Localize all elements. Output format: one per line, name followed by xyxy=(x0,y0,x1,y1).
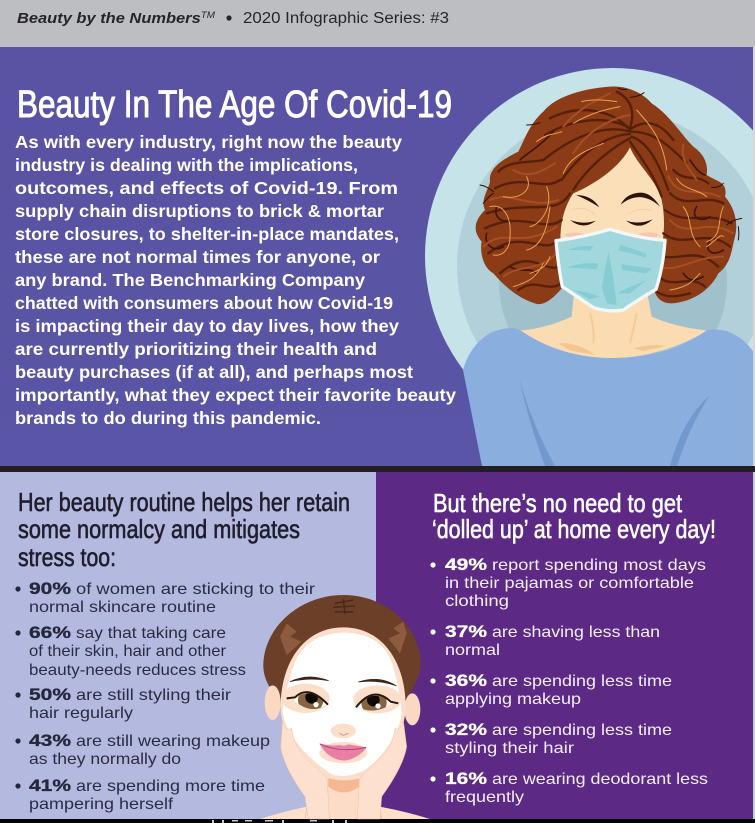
stat 32%: styling their hair xyxy=(445,740,575,757)
stat 43%: as they normally do xyxy=(29,751,181,768)
header bar: 2020 Infographic Series: #3 xyxy=(243,10,449,27)
stat 41%: pampering herself xyxy=(29,796,174,813)
intro text: importantly, what they expect their favorite beauty xyxy=(15,385,456,405)
nose xyxy=(339,733,348,735)
intro text: is impacting their day to day lives, how they xyxy=(15,316,399,336)
left heading xyxy=(18,487,350,572)
ears xyxy=(265,685,281,720)
stat 41% xyxy=(15,776,265,813)
hair xyxy=(476,86,736,304)
skin around nose xyxy=(331,724,356,738)
back hair bun xyxy=(375,757,400,787)
intro text: are currently prioritizing their health and xyxy=(15,339,377,359)
intro text: any brand. The Benchmarking Company xyxy=(15,270,365,290)
stat 66%: beauty-needs reduces stress xyxy=(29,662,246,679)
intro text: As with every industry, right now the beauty xyxy=(15,132,402,152)
stat 49%: in their pajamas or comfortable xyxy=(445,575,694,592)
stat 32%: are spending less time xyxy=(492,722,672,739)
mask xyxy=(556,229,665,311)
left heading: Her beauty routine helps her retain xyxy=(18,487,350,517)
left eye xyxy=(286,691,329,710)
stat 90% xyxy=(15,579,316,616)
stat 50%: hair regularly xyxy=(29,705,133,722)
stat 41%: 41% xyxy=(29,776,71,795)
stat 43% xyxy=(15,731,270,768)
stat 36%: applying makeup xyxy=(445,691,581,708)
header bar xyxy=(0,0,755,47)
stat 49%: 49% xyxy=(445,555,487,574)
panel: left routine xyxy=(0,472,376,819)
skin around lips xyxy=(319,742,367,763)
hair strands xyxy=(485,92,732,296)
footer clipped text fragments xyxy=(212,820,347,823)
intro text: supply chain disruptions to brick & mortar xyxy=(15,201,384,221)
header bar: Beauty by the Numbers xyxy=(17,10,185,27)
stat 32% xyxy=(430,720,672,757)
right heading: But there’s no need to get xyxy=(433,488,683,518)
stat 16%: frequently xyxy=(445,789,524,806)
stat 36%: 36% xyxy=(445,671,487,690)
stat 36% xyxy=(430,671,672,708)
face xyxy=(281,627,406,780)
hair highlights xyxy=(490,100,723,290)
stat 43%: are still wearing makeup xyxy=(76,733,270,750)
title: Beauty In The Age Of Covid-19 xyxy=(17,84,452,126)
divider strip xyxy=(0,466,755,472)
right heading xyxy=(432,488,716,544)
lips xyxy=(319,743,367,761)
stat 16% xyxy=(430,769,708,806)
stat 16%: are wearing deodorant less xyxy=(492,771,708,788)
stat 49%: clothing xyxy=(445,593,509,610)
stat 90%: 90% xyxy=(29,579,71,598)
stat 36%: are spending less time xyxy=(492,673,672,690)
white face mask xyxy=(283,633,402,776)
intro text: store closures, to shelter-in-place mandates, xyxy=(15,224,399,244)
intro text: brands to do during this pandemic. xyxy=(15,408,321,428)
left heading: stress too: xyxy=(18,542,116,572)
right eye xyxy=(355,694,398,710)
hair wisps xyxy=(480,88,742,240)
intro text: outcomes, and effects of Covid-19. From xyxy=(15,178,398,198)
hands xyxy=(281,721,329,819)
stat 37%: are shaving less than xyxy=(492,624,660,641)
stat 50% xyxy=(15,685,232,722)
left heading: some normalcy and mitigates xyxy=(18,514,300,544)
neck xyxy=(521,296,706,358)
stat 49% xyxy=(430,555,706,610)
stat 66% xyxy=(15,623,246,679)
stat 66%: 66% xyxy=(29,623,71,642)
stat 43%: 43% xyxy=(29,731,71,750)
sweater xyxy=(463,328,753,466)
illustration: woman with face mask cream xyxy=(260,595,430,819)
shoulders xyxy=(260,807,430,819)
eyebrows xyxy=(290,677,397,686)
stat 37%: 37% xyxy=(445,622,487,641)
eyebrows xyxy=(576,193,660,207)
stat 41%: are spending more time xyxy=(76,778,265,795)
stat 50%: are still styling their xyxy=(76,687,232,704)
intro text: industry is dealing with the implications, xyxy=(15,155,358,175)
stat 16%: 16% xyxy=(445,769,487,788)
header bar: TM xyxy=(201,10,216,20)
intro text xyxy=(15,132,456,428)
stat 37%: normal xyxy=(445,642,500,659)
cheeks xyxy=(565,232,584,237)
intro text: chatted with consumers about how Covid-19 xyxy=(15,293,393,313)
stat 66%: say that taking care xyxy=(76,625,226,642)
hair xyxy=(263,595,421,703)
stat 90%: normal skincare routine xyxy=(29,599,216,616)
illustration: woman in face mask xyxy=(425,68,755,466)
neck xyxy=(307,767,380,819)
stat 37% xyxy=(430,622,660,659)
face xyxy=(560,148,664,238)
stat 32%: 32% xyxy=(445,720,487,739)
stat 50%: 50% xyxy=(29,685,71,704)
stat 49%: report spending most days xyxy=(492,557,706,574)
intro text: these are not normal times for anyone, or xyxy=(15,247,380,267)
panel: intro xyxy=(0,47,755,466)
skin around eyes xyxy=(282,684,330,713)
intro text: beauty purchases (if at all), and perhaps most xyxy=(15,362,413,382)
stat 66%: of their skin, hair and other xyxy=(29,643,227,660)
panel: right dolled up xyxy=(376,472,755,819)
eyes xyxy=(570,219,653,226)
stat 90%: of women are sticking to their xyxy=(76,581,316,598)
